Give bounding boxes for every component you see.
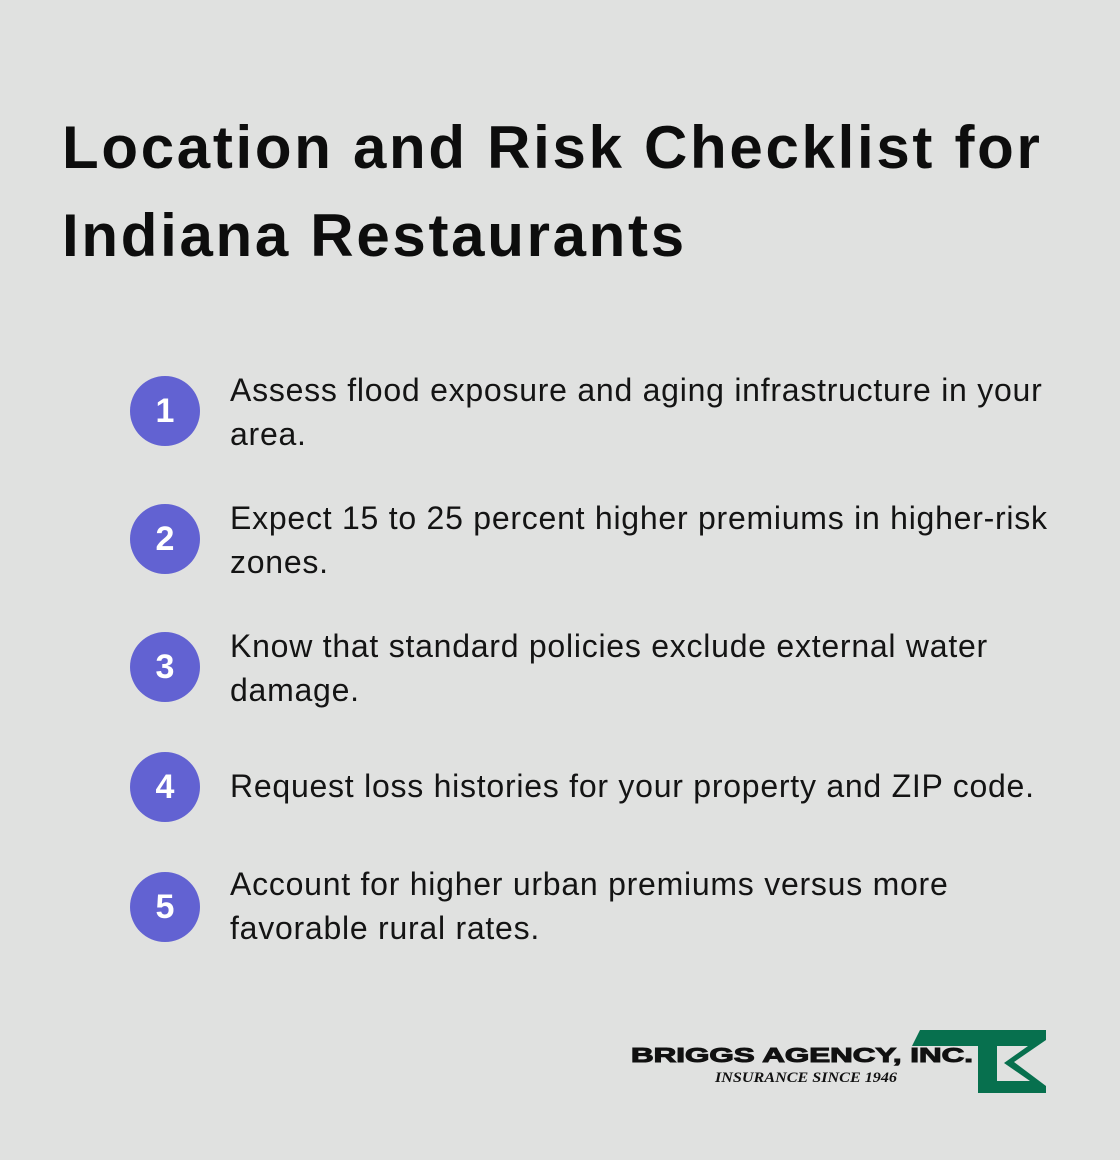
text 5: favorable rural rates. xyxy=(230,910,540,946)
badge 3 xyxy=(130,632,200,702)
text 2 xyxy=(230,500,1048,580)
badge 3: 3 xyxy=(156,648,174,686)
item 3 xyxy=(130,628,988,708)
text 1 xyxy=(230,372,1042,452)
title xyxy=(62,114,1043,269)
badge 4: 4 xyxy=(156,768,174,806)
badge 4 xyxy=(130,752,200,822)
badge 1: 1 xyxy=(156,392,174,430)
title: Location and Risk Checklist for xyxy=(62,114,1043,181)
text 1: Assess flood exposure and aging infrastructure in your xyxy=(230,372,1042,408)
text 3 xyxy=(230,628,988,708)
item 2 xyxy=(130,500,1048,580)
text 1: area. xyxy=(230,416,307,452)
logo wordmark: BRIGGS AGENCY, INC. xyxy=(631,1045,973,1067)
item 5 xyxy=(130,866,948,946)
text 3: damage. xyxy=(230,672,360,708)
logo mark xyxy=(912,1030,1046,1093)
text 5 xyxy=(230,866,948,946)
text 2: zones. xyxy=(230,544,329,580)
badge 5 xyxy=(130,872,200,942)
item 4 xyxy=(130,752,1035,822)
text 4: Request loss histories for your property and ZIP code. xyxy=(230,768,1035,804)
title: Indiana Restaurants xyxy=(62,202,687,269)
badge 2 xyxy=(130,504,200,574)
item 1 xyxy=(130,372,1042,452)
badge 1 xyxy=(130,376,200,446)
badge 5: 5 xyxy=(156,888,174,926)
text 3: Know that standard policies exclude external water xyxy=(230,628,988,664)
text 2: Expect 15 to 25 percent higher premiums in higher-risk xyxy=(230,500,1048,536)
text 5: Account for higher urban premiums versus more xyxy=(230,866,948,902)
badge 2: 2 xyxy=(156,520,174,558)
logo tagline: INSURANCE SINCE 1946 xyxy=(714,1070,898,1086)
